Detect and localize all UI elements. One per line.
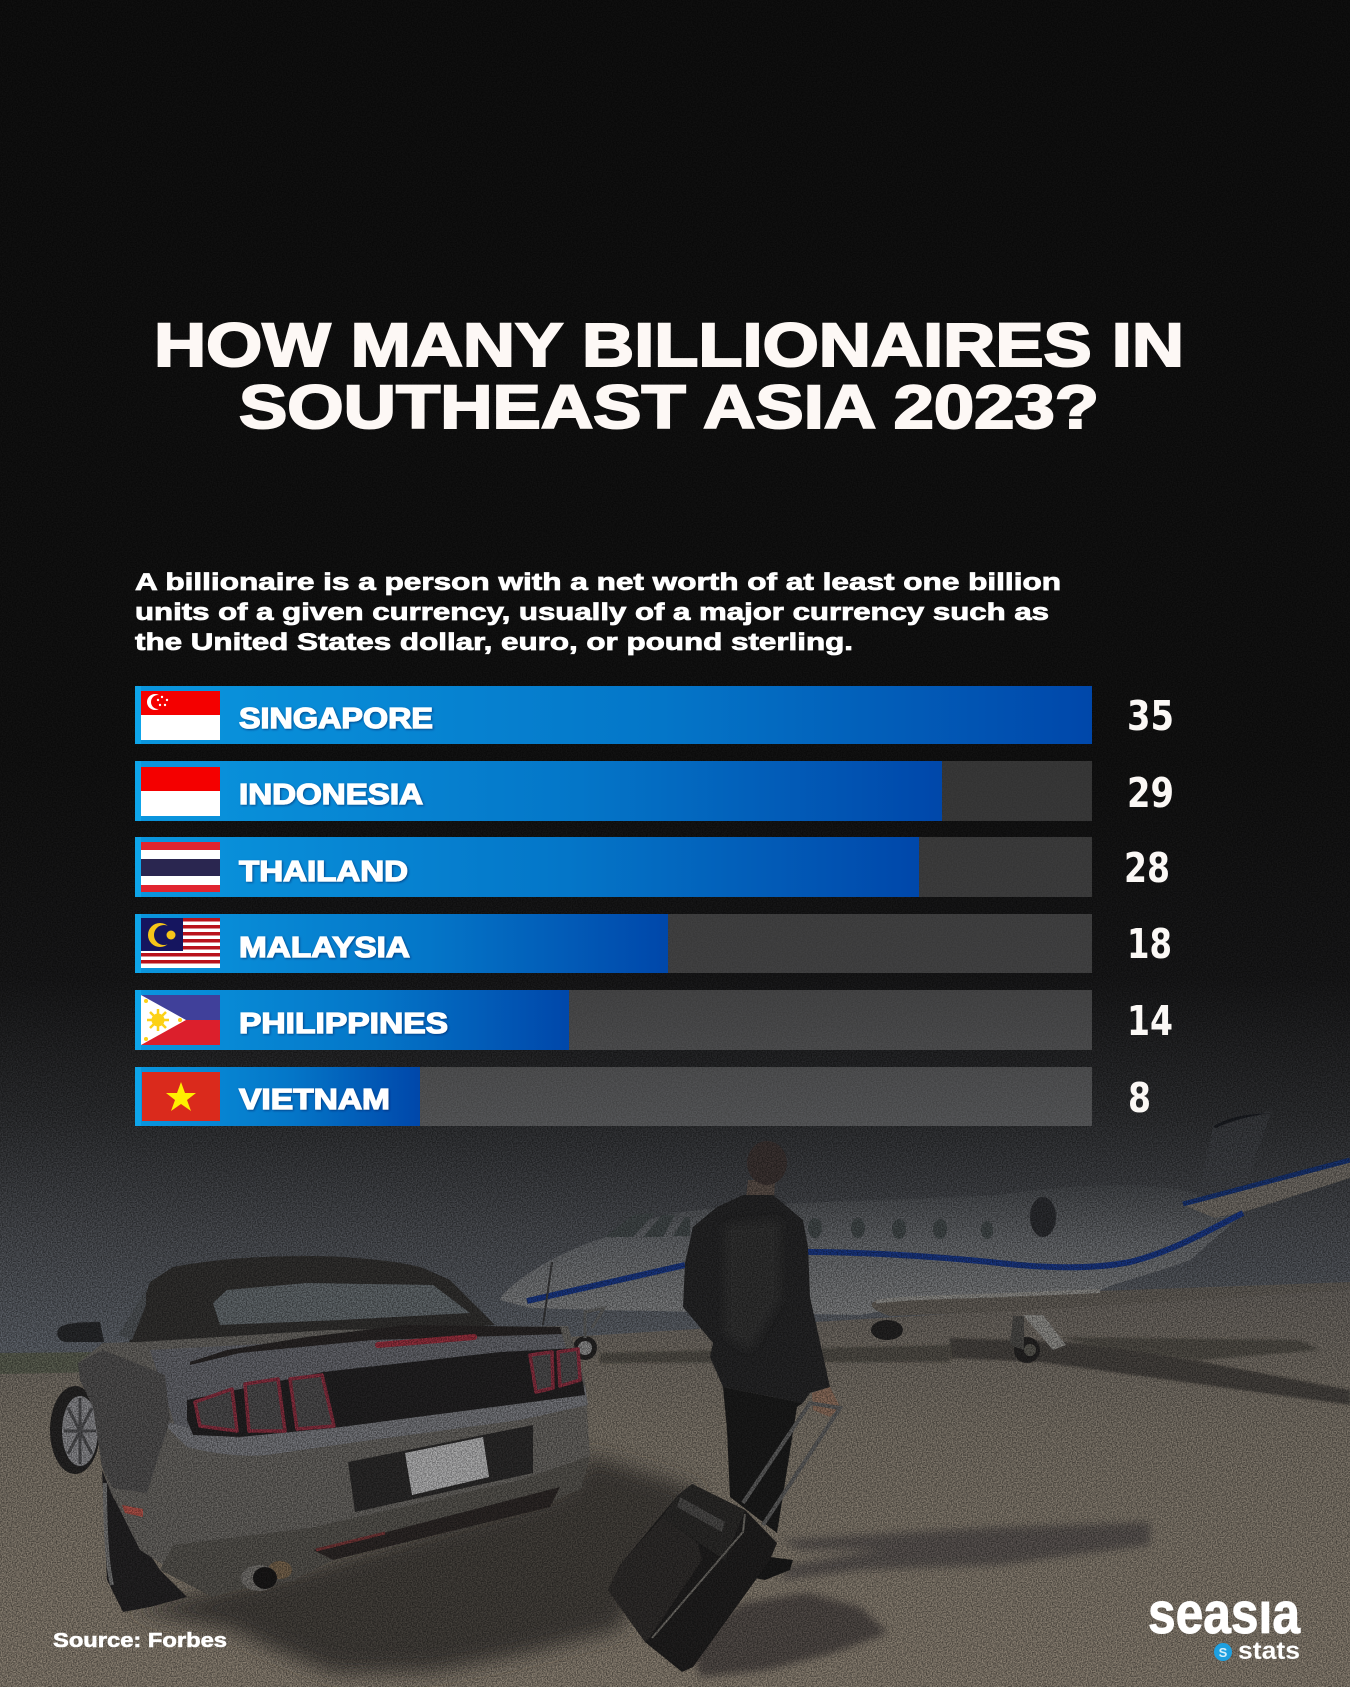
row: Thailand: THAILAND [239,856,408,888]
black tail panel [187,1348,585,1437]
values: 28 [1124,844,1170,892]
flag: Malaysia [141,918,220,968]
jet tail fin [1197,1110,1272,1200]
grass strip [0,1352,110,1374]
bar chart [135,686,1092,1126]
jet blue stripe [527,1213,1243,1301]
jet landing gear [543,1262,1066,1363]
row: Vietnam [135,1067,1092,1126]
jacket highlight [725,1220,780,1350]
flag: Singapore [141,691,220,740]
hand [812,1387,840,1417]
jet fuselage [500,1185,1245,1315]
suitcase handle [743,1403,840,1525]
tarmac ground [0,1290,1350,1687]
flag: Philippines [141,995,220,1045]
photo: airport scene [0,1110,1350,1687]
icon: stats dot: S [1219,1645,1228,1660]
row: Philippines [135,990,1092,1050]
values: 14 [1127,997,1173,1045]
rear window [213,1283,470,1325]
logo: seasia stats: stats [1238,1637,1300,1665]
suitcase top panel [662,1484,745,1560]
licence plate [405,1437,489,1495]
row: Malaysia [135,914,1092,973]
sports car [50,1256,590,1612]
values: 29 [1127,769,1174,817]
flag: Vietnam [142,1072,220,1121]
tail lights [195,1349,580,1431]
row: Vietnam: VIETNAM [239,1084,390,1116]
jet wing [872,1282,1350,1316]
head [747,1141,787,1185]
description text: units of a given currency, usually of a major currency such as [135,599,1049,626]
jet engine [1030,1197,1056,1237]
icon: stats dot [1214,1643,1232,1661]
row: Thailand [135,837,1092,897]
source note: Source: Forbes [53,1630,227,1652]
licence plate recess [348,1425,533,1512]
man in suit with suitcase [608,1141,840,1672]
side marker [122,1505,143,1517]
private jet [500,1110,1350,1363]
front wheel [50,1386,100,1474]
suitcase [608,1484,777,1672]
row: Indonesia [135,761,1092,821]
values: 35 [1127,692,1174,740]
suitcase pocket [608,1517,702,1642]
upper trunk panel [150,1328,582,1440]
description text: the United States dollar, euro, or pound sterling. [135,629,853,656]
logo: seasia stats: seasia [1148,1581,1301,1646]
exhaust pipe [241,1561,292,1591]
trousers [723,1387,803,1533]
values [1124,692,1174,1122]
car body [78,1326,590,1597]
row: Philippines: PHILIPPINES [239,1008,448,1040]
lower bumper [160,1456,590,1597]
suit jacket [683,1195,830,1403]
logo: seasia stats [1149,1601,1301,1661]
flag: Indonesia [141,767,220,816]
values: 8 [1128,1074,1151,1122]
wing mirror [57,1322,104,1342]
brake light [378,1337,474,1345]
spoiler [190,1325,562,1365]
lower diffuser [313,1487,560,1560]
row: Singapore: SINGAPORE [239,703,433,735]
ground shadows [130,1337,1350,1677]
title: SOUTHEAST ASIA 2023? [239,373,1099,441]
description text: A billionaire is a person with a net worth of at least one billion [135,569,1061,596]
side window [118,1290,146,1340]
rear tire [102,1470,187,1612]
row: Indonesia: INDONESIA [239,779,423,811]
row: Singapore [135,686,1092,744]
side panel shade [78,1350,170,1493]
shoe [755,1557,793,1580]
convertible roof [128,1256,495,1345]
description text [135,569,1061,656]
values: 18 [1127,920,1172,968]
jet stabilizer [1183,1162,1350,1218]
title: HOW MANY BILLIONAIRES IN [154,311,1184,379]
neck [746,1180,775,1198]
title [154,311,1184,441]
jet windows [605,1213,993,1239]
bumper highlight band [160,1385,588,1456]
row: Malaysia: MALAYSIA [239,932,410,964]
flag: Thailand [141,842,220,892]
